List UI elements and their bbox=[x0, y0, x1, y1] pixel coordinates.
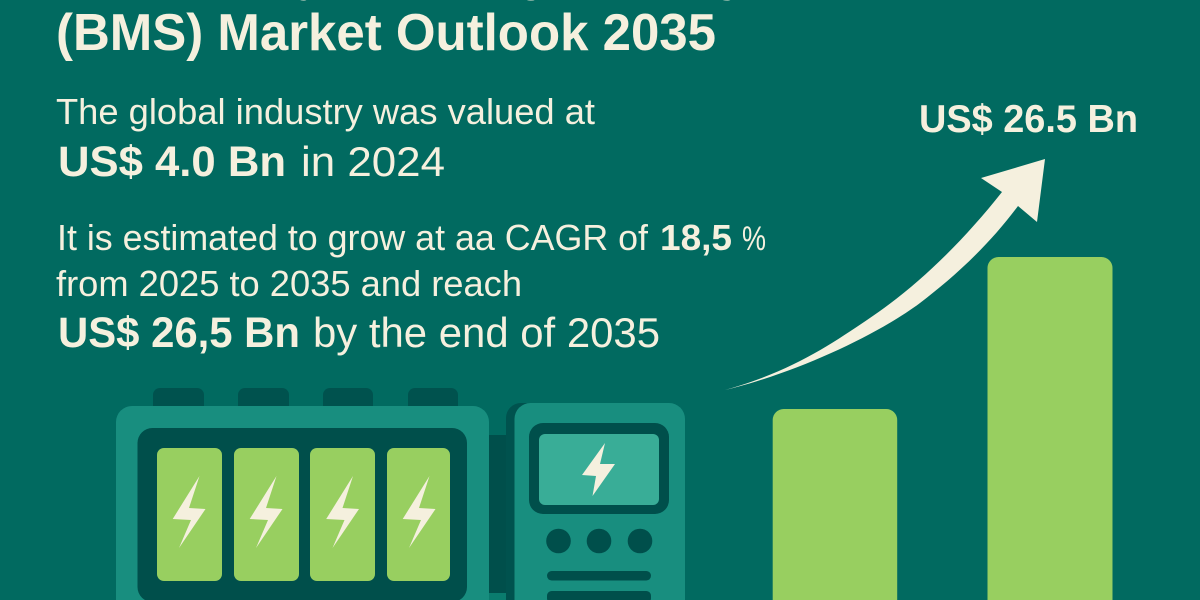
text block: CAGR forecast: by the end of 2035 bbox=[313, 309, 660, 356]
text block: CAGR forecast: from 2025 to 2035 and reach bbox=[56, 263, 522, 304]
text block: 2024 valuation: US$ 4.0 Bn bbox=[58, 138, 286, 186]
title: (BMS) Market Outlook 2035 bbox=[56, 4, 716, 62]
text block: CAGR forecast bbox=[56, 217, 766, 357]
text block: CAGR forecast: It is estimated to grow at aa CAGR of bbox=[57, 217, 649, 258]
bar chart bbox=[773, 257, 1112, 600]
controller screen bbox=[529, 423, 669, 514]
text block: CAGR forecast: US$ 26,5 Bn bbox=[58, 309, 300, 357]
lightning bolts bbox=[173, 476, 435, 548]
battery inner tray bbox=[138, 428, 467, 600]
controller buttons bbox=[546, 529, 652, 553]
text block: CAGR forecast: 18,5 bbox=[660, 217, 732, 258]
icon: screen bolt bbox=[582, 443, 615, 496]
text block: 2024 valuation: The global industry was valued at bbox=[56, 91, 595, 132]
battery terminals bbox=[153, 388, 458, 418]
connector between battery and controller bbox=[489, 435, 514, 600]
text block: 2024 valuation: in 2024 bbox=[301, 138, 445, 185]
text block: 2024 valuation bbox=[56, 91, 595, 186]
controller status lines bbox=[547, 571, 651, 600]
battery casing bbox=[116, 406, 489, 600]
label: 2035 value: US$ 26.5 Bn bbox=[919, 98, 1138, 141]
icon: battery pack bbox=[116, 388, 489, 600]
icon: BMS controller bbox=[506, 403, 685, 600]
battery cells bbox=[157, 448, 450, 581]
text block: CAGR forecast: % bbox=[742, 220, 766, 258]
arrow: growth bbox=[725, 159, 1045, 390]
